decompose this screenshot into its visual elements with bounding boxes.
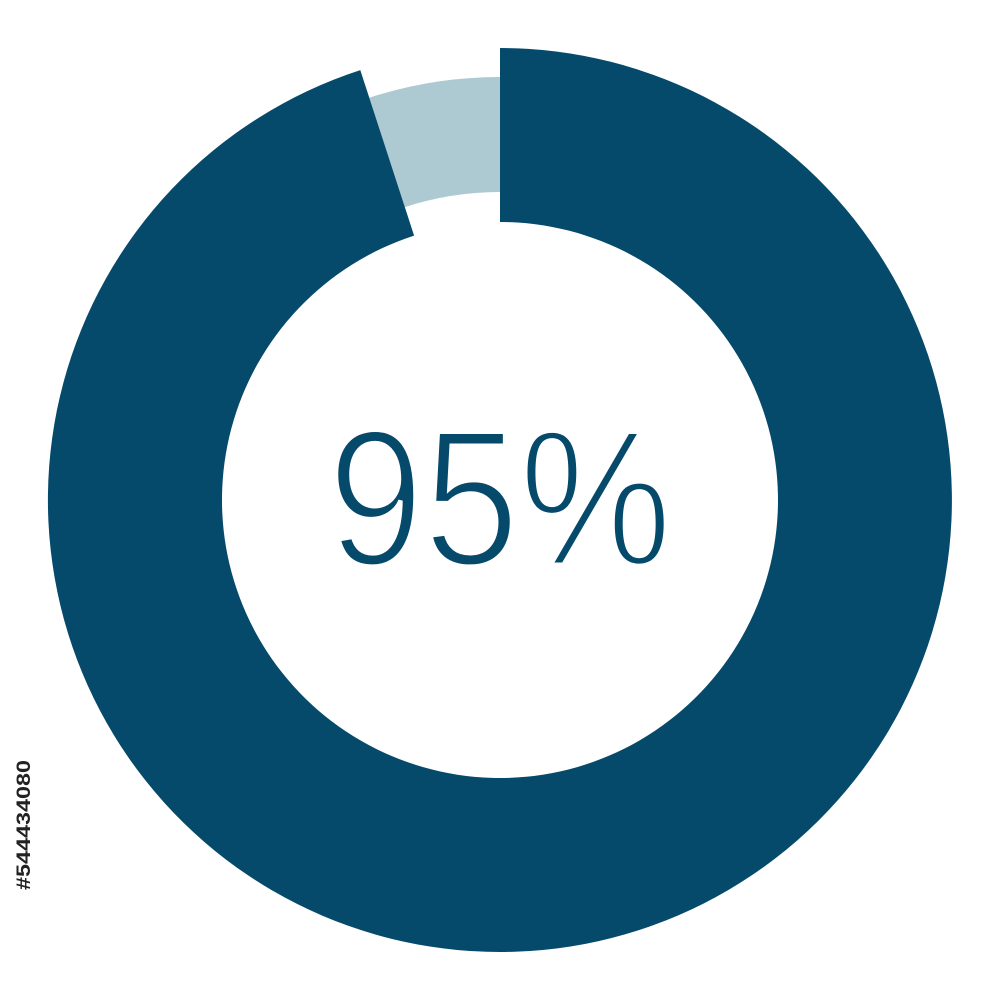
vertical id label: #544434080: [14, 760, 35, 890]
percentage label: 95%: [328, 390, 672, 607]
light track segment (remaining 5%): [369, 77, 500, 207]
